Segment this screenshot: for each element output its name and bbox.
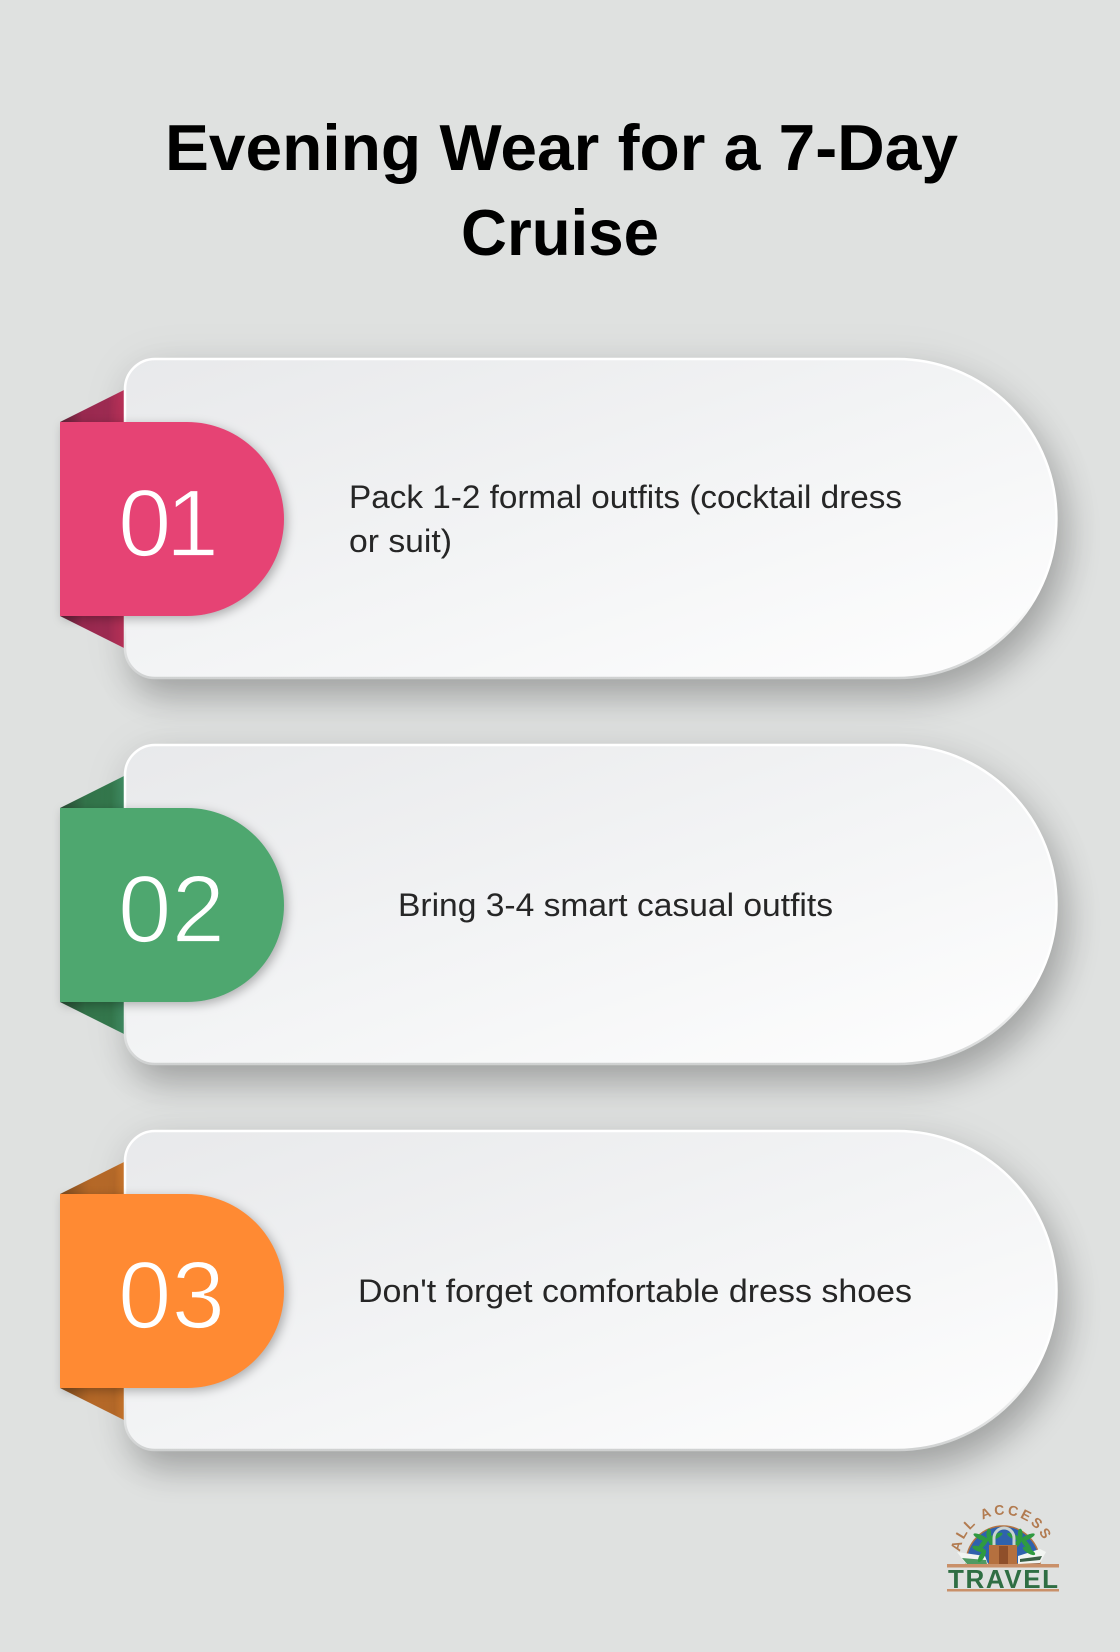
icon: ribbon folds 02 (60, 776, 124, 1034)
badge 01 (60, 422, 284, 616)
number 01: 01 (118, 470, 219, 577)
text 03: Don't forget comfortable dress shoes (358, 1273, 912, 1309)
logo wordmark: TRAVEL (948, 1564, 1058, 1594)
logo globe (966, 1526, 1040, 1564)
panel: step 03 (60, 1131, 1056, 1450)
logo: All Access Travel (947, 1505, 1059, 1594)
card 01 (125, 359, 1056, 678)
logo arc text: ALL ACCESS (952, 1505, 1050, 1552)
number 03: 03 (118, 1242, 225, 1349)
logo padlock (989, 1528, 1017, 1564)
logo palms (972, 1529, 1036, 1563)
title (165, 111, 958, 269)
panel: step 02 (60, 745, 1056, 1064)
logo bands (947, 1564, 1059, 1592)
badge 03 (60, 1194, 284, 1388)
title: Cruise (461, 196, 659, 269)
title: Evening Wear for a 7-Day (165, 111, 958, 184)
icon: ribbon folds 03 (60, 1162, 124, 1420)
text 01: Pack 1-2 formal outfits (cocktail dress (349, 479, 902, 515)
badge 02 (60, 808, 284, 1002)
icon: ribbon folds 01 (60, 390, 124, 648)
number 02: 02 (118, 856, 225, 963)
card 02 (125, 745, 1056, 1064)
logo boats (957, 1549, 1046, 1564)
text 02: Bring 3-4 smart casual outfits (398, 887, 833, 923)
card 03 (125, 1131, 1056, 1450)
text 01: or suit) (349, 523, 452, 559)
text 01 (349, 479, 902, 559)
panel: step 01 (60, 359, 1056, 678)
